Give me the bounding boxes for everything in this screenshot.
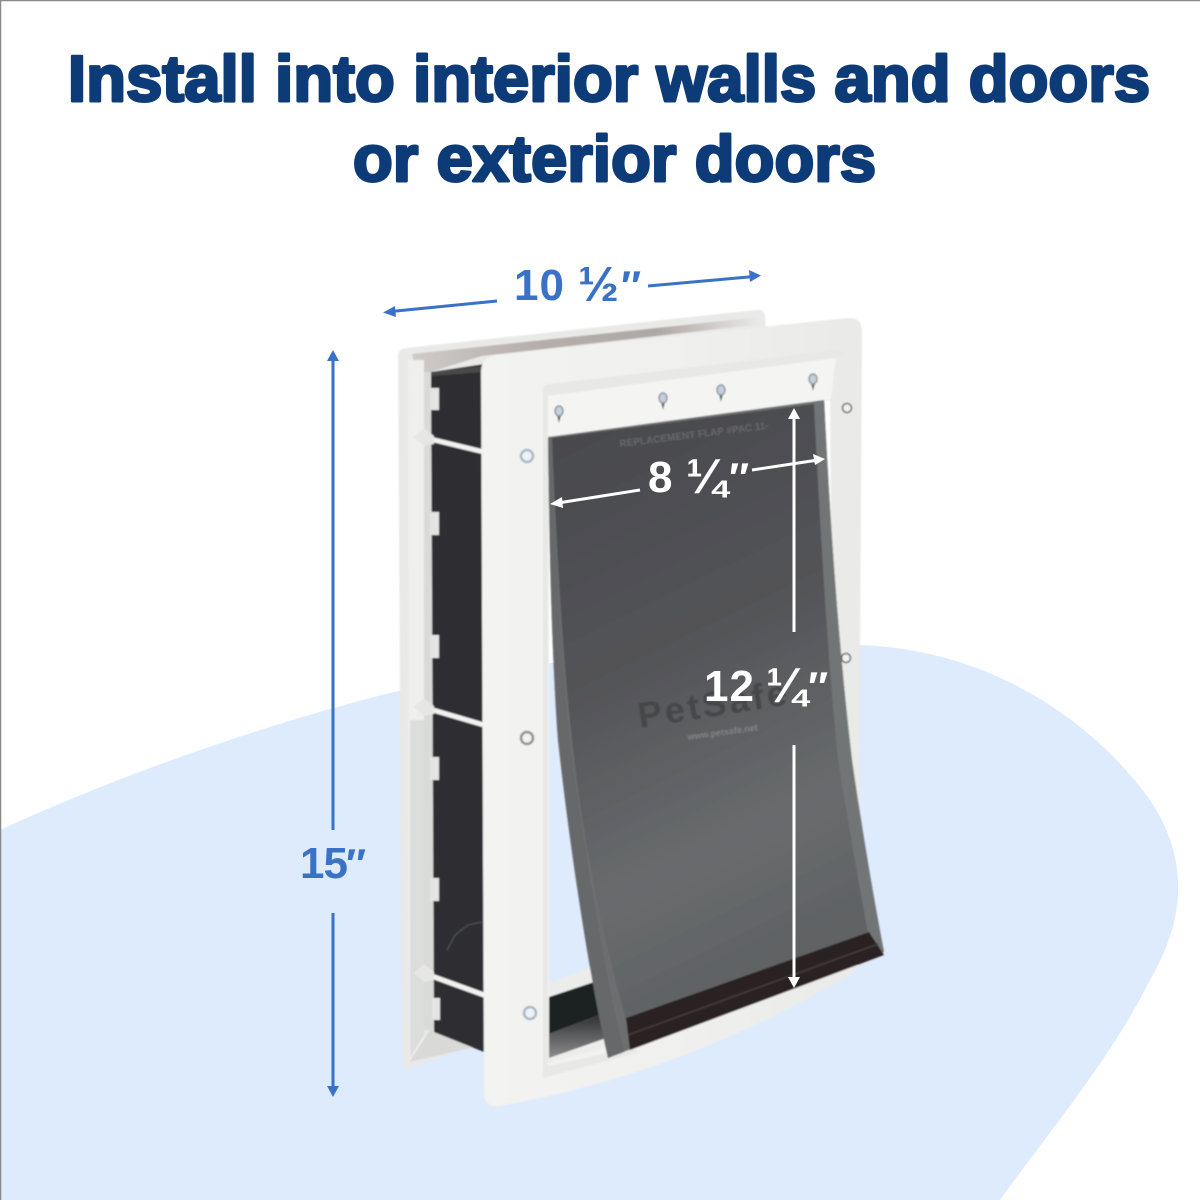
front frame [481,318,862,1106]
back frame [398,310,766,1068]
title: Install into interior walls and doors [68,42,1150,115]
retaining clips [430,388,440,1020]
dimension: flap width 8 1/4: 8 [648,453,672,502]
dimension: flap height 12 1/4 [704,408,828,988]
dimension: width 10 1/2: ″ [621,262,641,309]
background blob [0,644,1178,1200]
dimension: flap width 8 1/4 [550,450,825,508]
flap embossed logo: PetSafe [635,672,789,736]
dimension: flap height 12 1/4: 12 [704,662,754,711]
lower sill [549,964,625,1062]
dark insert block [431,364,484,1052]
dimension: flap width 8 1/4: ¼ [686,450,731,504]
flap bottom weight bar [626,932,884,1050]
flap [548,400,884,1058]
frame nuts [521,404,852,1019]
dimension: width 10 1/2: ½ [578,258,619,312]
dimension: height 15 [300,350,366,1097]
dimension: height 15: ″ [346,840,366,887]
flap web address: www.petsafe.net [686,722,758,742]
dimension: height 15: 15 [300,839,348,888]
dimension: flap height 12 1/4: ″ [808,663,828,710]
dimension: flap width 8 1/4: ″ [729,454,749,501]
dimension: width 10 1/2: 10 [514,261,564,310]
flap replacement text: REPLACEMENT FLAP #PAC 11- [619,421,769,450]
connector rods [426,438,484,995]
frame moulded recess [543,350,844,1078]
product: pet door [398,310,884,1106]
top frame bar [548,358,836,437]
dimension: width 10 1/2 [383,258,761,317]
dimension: flap height 12 1/4: ¼ [766,659,811,713]
rod junction bulges [414,428,434,982]
title: or exterior doors [353,122,876,195]
frame screws [555,374,817,423]
title [68,42,1150,195]
